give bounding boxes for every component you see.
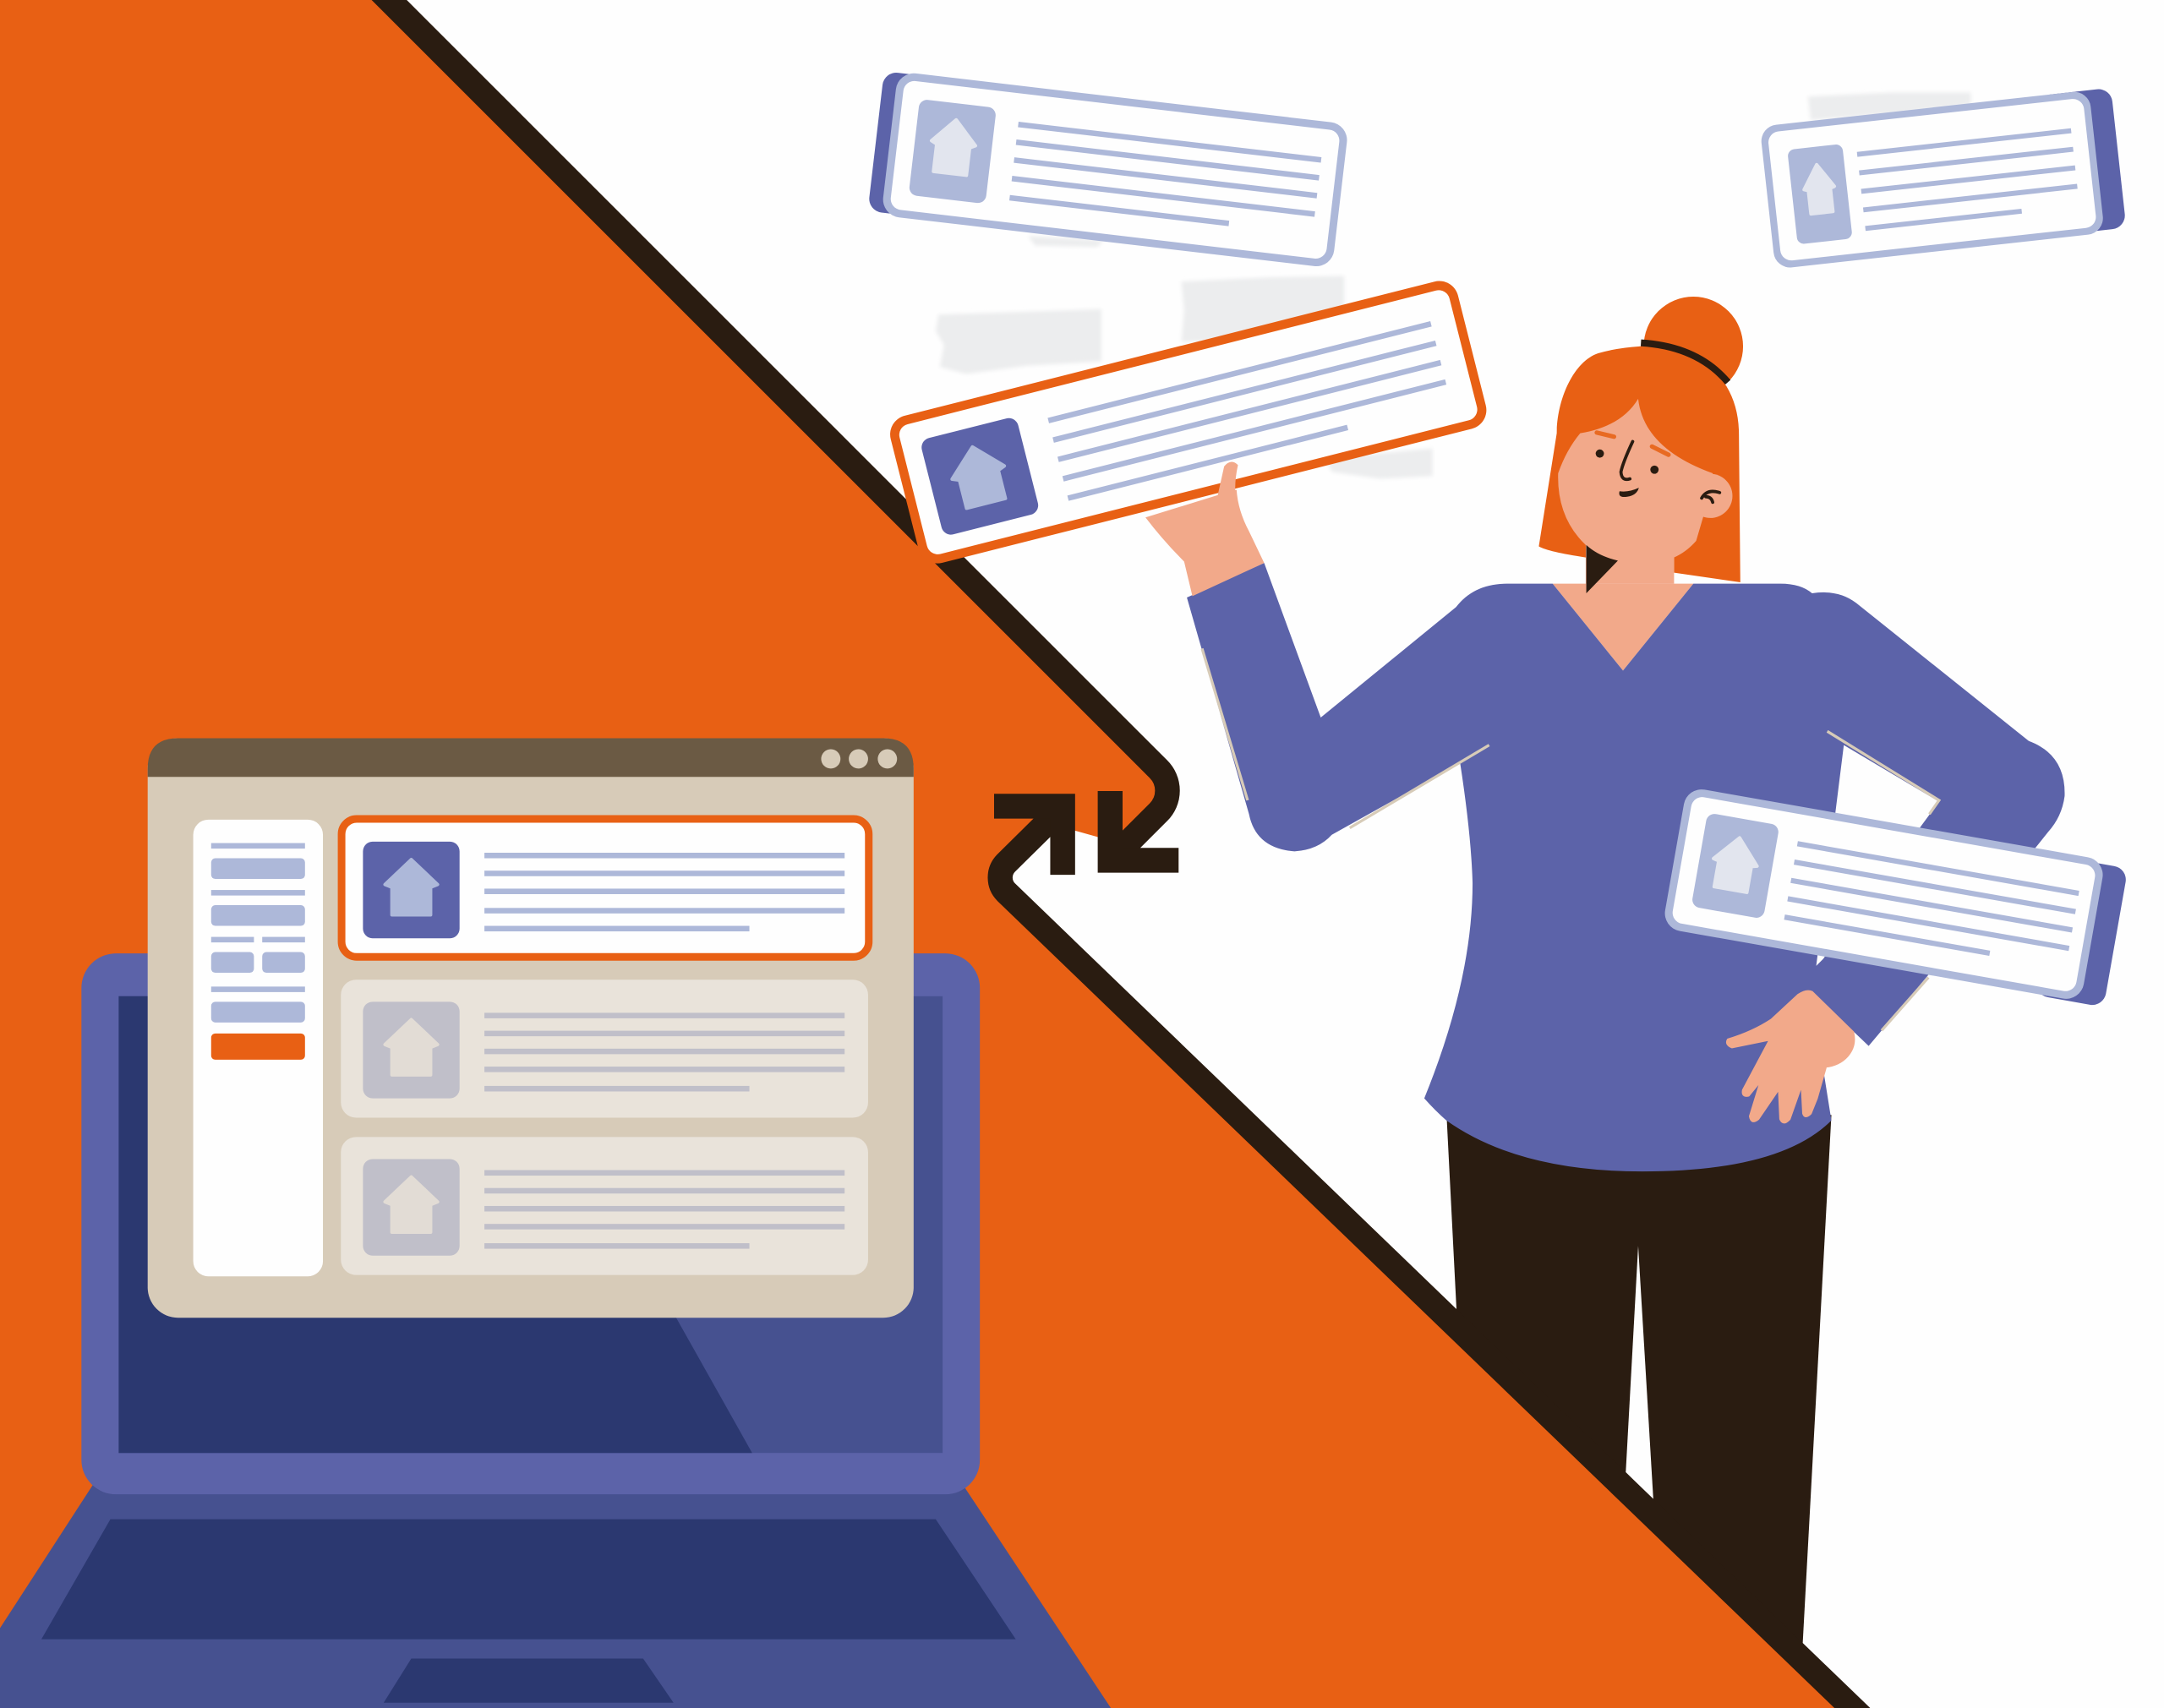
- gap between body and right arm: [1817, 745, 1939, 966]
- hand on hip: [1727, 991, 1854, 1122]
- eyes, nose, mouth, ear: [1596, 433, 1719, 502]
- stripe lower: [1000, 810, 1880, 1708]
- stripe upper: [362, 0, 1167, 859]
- lid: [81, 953, 980, 1494]
- raised finger over card: [1216, 462, 1238, 508]
- sidebar: [194, 820, 323, 1276]
- raised palm: [1145, 490, 1265, 596]
- listing row active: [342, 819, 869, 957]
- arrow up right: [994, 794, 1075, 875]
- title bar: [148, 738, 914, 777]
- browser window: [148, 738, 914, 1318]
- laptop base: [0, 1483, 1111, 1708]
- neck shadow base: [1553, 584, 1693, 670]
- hair band: [1641, 343, 1728, 382]
- floating card center orange: [886, 277, 1490, 568]
- held card right: [1662, 787, 2128, 1007]
- gap between legs: [1626, 1246, 1653, 1500]
- diagonal stripe with arrows: [362, 0, 1880, 1708]
- floating card top right: [1760, 88, 2127, 270]
- trackpad: [384, 1658, 674, 1703]
- window dots: [821, 750, 897, 768]
- arrow down left: [1098, 791, 1178, 873]
- woman figure: [1145, 297, 2065, 1708]
- faint smudges behind cards: [936, 92, 1970, 479]
- hair back: [1538, 347, 1740, 582]
- window body: [148, 738, 914, 1318]
- listing row three: [341, 1137, 868, 1275]
- floating card top left: [867, 70, 1349, 268]
- neck shadow: [1587, 545, 1618, 593]
- hair fill over bun base: [1640, 347, 1726, 400]
- screen shade: [118, 996, 752, 1453]
- paper edge lines: [1202, 648, 1939, 1030]
- keyboard: [41, 1520, 1016, 1640]
- screen: [118, 996, 943, 1453]
- hair bun: [1643, 297, 1743, 396]
- sweater: [1187, 563, 2065, 1171]
- trousers: [1446, 1110, 1832, 1708]
- ear: [1688, 474, 1732, 518]
- listing row two: [341, 980, 868, 1117]
- face and neck: [1558, 399, 1713, 584]
- laptop: [0, 953, 1111, 1708]
